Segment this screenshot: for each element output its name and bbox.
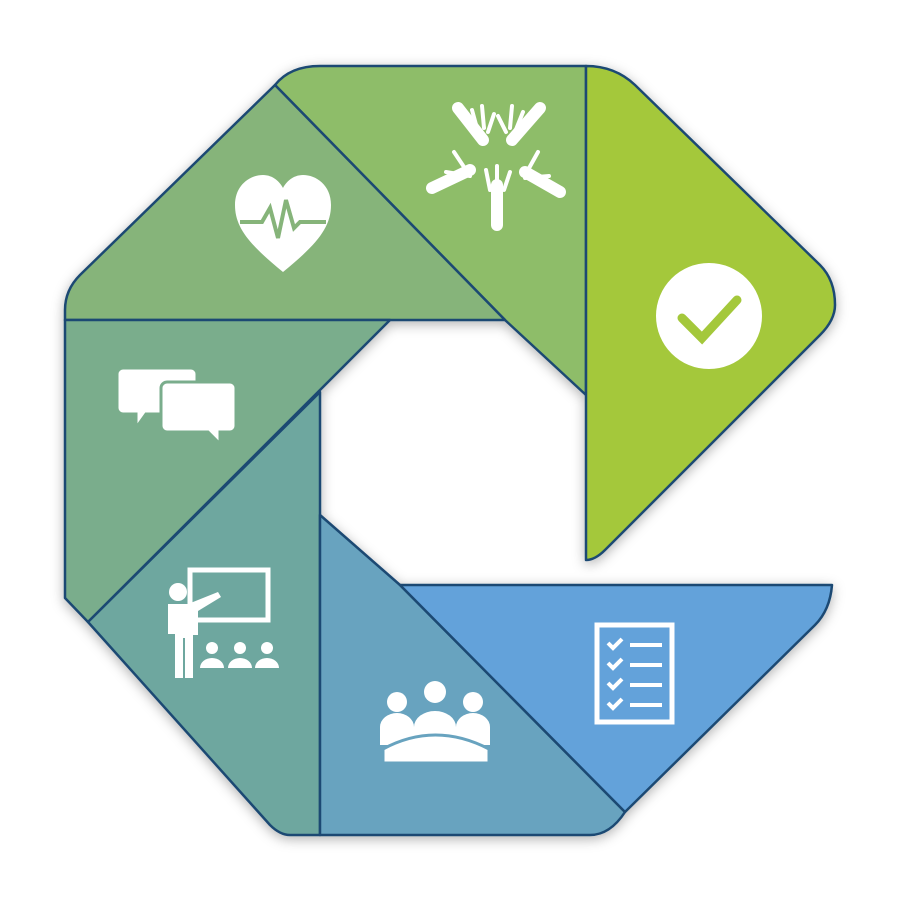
diagram: octagon ring (65, 66, 835, 835)
panel: heart (65, 85, 505, 320)
icon: checklist (597, 625, 672, 722)
icon: chat bubbles (117, 368, 236, 444)
panel: meeting (320, 515, 625, 835)
icon: meeting (380, 681, 490, 763)
panel: teacher (88, 392, 320, 835)
icon: hands (432, 106, 560, 225)
icon: heart (235, 175, 331, 272)
panel: check (586, 66, 835, 560)
panel: checklist (400, 585, 832, 812)
icon: teacher (168, 570, 279, 678)
icon: check circle (656, 263, 762, 369)
panel: hands (275, 66, 586, 395)
panel: chat (65, 320, 390, 622)
